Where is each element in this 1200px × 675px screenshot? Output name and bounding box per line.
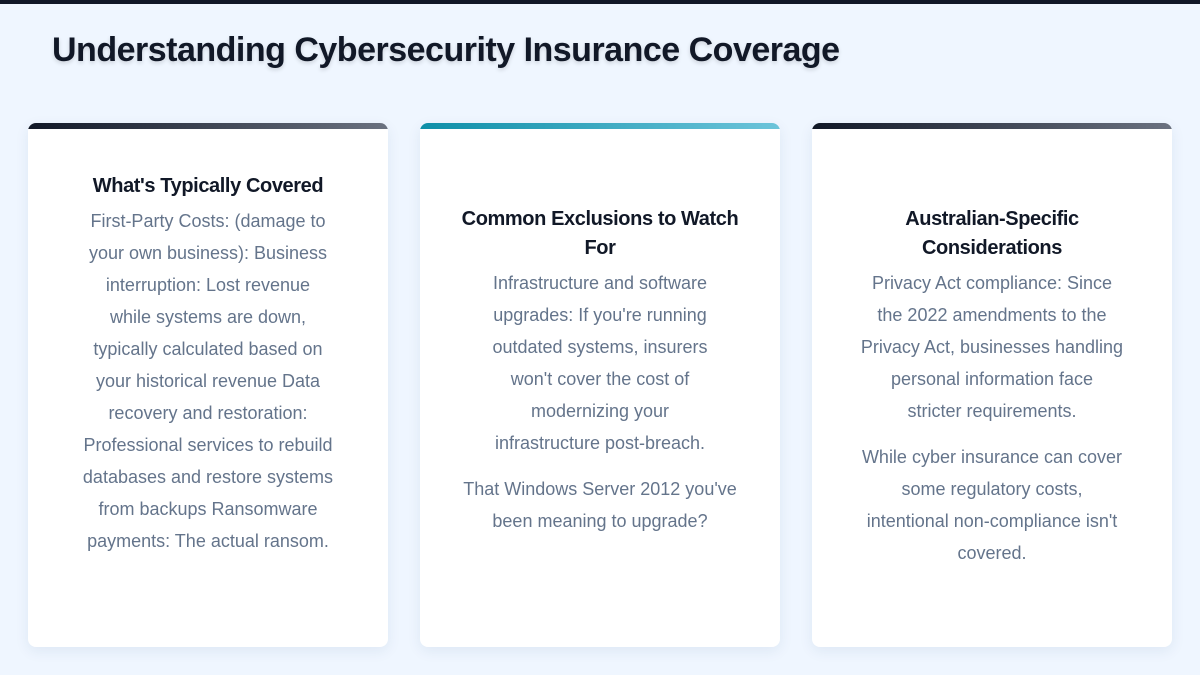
text block: australian: personal information face bbox=[891, 369, 1093, 389]
text block: covered: databases and restore systems bbox=[83, 467, 333, 487]
text block: covered bbox=[83, 175, 333, 551]
panel: australian considerations bbox=[812, 123, 1172, 647]
text block: exclusions bbox=[462, 208, 738, 531]
panel: exclusions bbox=[420, 123, 780, 647]
text block: covered: while systems are down, bbox=[110, 307, 306, 327]
text block: exclusions: won't cover the cost of bbox=[511, 369, 689, 389]
text block: covered: What's Typically Covered bbox=[93, 175, 323, 197]
text block: australian bbox=[861, 208, 1123, 563]
panel: typically covered bbox=[28, 123, 388, 647]
text block: covered: First-Party Costs: (damage to bbox=[90, 211, 326, 231]
title: Understanding Cybersecurity Insurance Coverage bbox=[52, 31, 840, 69]
text block: australian: the 2022 amendments to the bbox=[877, 305, 1107, 325]
text block: australian: stricter requirements. bbox=[907, 401, 1077, 421]
text block: australian: Considerations bbox=[922, 237, 1062, 259]
text block: covered: your historical revenue Data bbox=[96, 371, 320, 391]
text block: exclusions: been meaning to upgrade? bbox=[492, 511, 708, 531]
text block: covered: typically calculated based on bbox=[93, 339, 323, 359]
text block: exclusions: upgrades: If you're running bbox=[493, 305, 707, 325]
text block: australian: Australian-Specific bbox=[905, 208, 1079, 230]
text block: australian: Privacy Act, businesses handling bbox=[861, 337, 1123, 357]
text block: covered: recovery and restoration: bbox=[108, 403, 308, 423]
text block: australian: covered. bbox=[957, 543, 1027, 563]
text block: exclusions: infrastructure post-breach. bbox=[495, 433, 705, 453]
text block: covered: interruption: Lost revenue bbox=[106, 275, 310, 295]
text block: australian: some regulatory costs, bbox=[901, 479, 1083, 499]
text block: australian: While cyber insurance can cover bbox=[862, 447, 1122, 467]
text block: australian: intentional non-compliance isn't bbox=[867, 511, 1117, 531]
text block: covered: Professional services to rebuild bbox=[83, 435, 333, 455]
text block: covered: your own business): Business bbox=[89, 243, 327, 263]
text block: exclusions: Common Exclusions to Watch bbox=[462, 208, 738, 230]
text block: covered: from backups Ransomware bbox=[98, 499, 318, 519]
text block: australian: Privacy Act compliance: Since bbox=[872, 273, 1112, 293]
text block: exclusions: That Windows Server 2012 you've bbox=[463, 479, 737, 499]
text block: exclusions: outdated systems, insurers bbox=[492, 337, 708, 357]
text block: exclusions: modernizing your bbox=[531, 401, 669, 421]
text block: exclusions: Infrastructure and software bbox=[493, 273, 707, 293]
text block: exclusions: For bbox=[584, 237, 616, 259]
text block: covered: payments: The actual ransom. bbox=[87, 531, 329, 551]
